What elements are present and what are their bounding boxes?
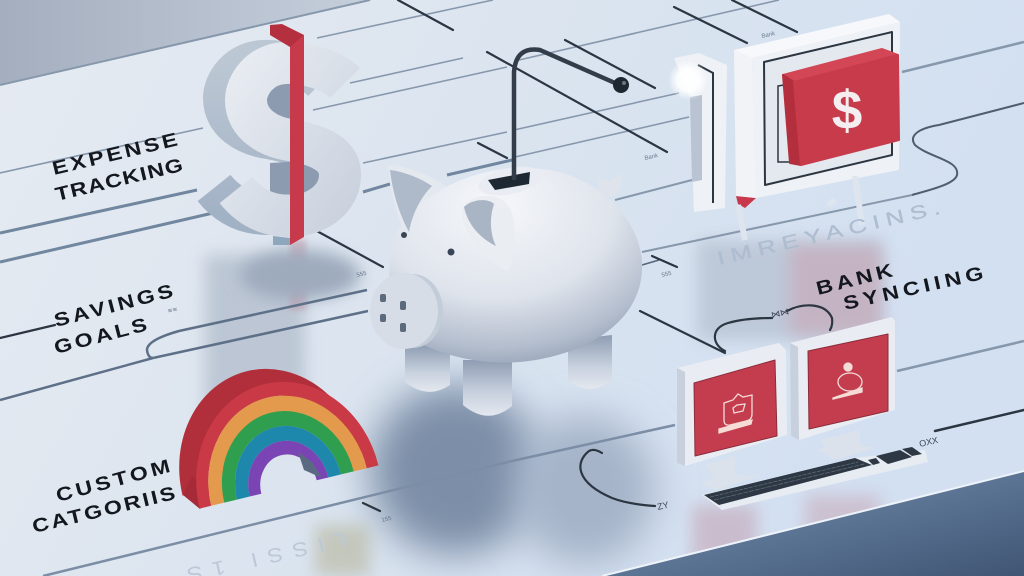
label: savings goals: SAVINGS [52,281,175,331]
pig right ear [462,196,515,272]
label: expense tracking [50,129,185,205]
small annotation marks: Bank [644,153,660,162]
top left background wedge [0,0,372,85]
small annotation marks: ≋≋ [167,307,178,315]
left monitor [677,343,787,490]
small annotation marks: ⋈⋈ [770,306,790,320]
small annotation marks: 555 [661,271,673,279]
pig body [388,168,642,363]
small annotation marks [167,31,939,524]
rainbow back [158,350,361,496]
small annotation marks: 555 [356,271,368,279]
small annotation marks: Bank [761,31,777,40]
keyboard [702,447,928,510]
label: custom categories: CUSTOM [54,456,172,506]
icon: safe with red dollar card: $ [832,79,862,141]
pig snout [383,274,443,348]
small annotation marks: ZY [656,500,670,512]
label: custom categories: CATGORIIS [30,483,177,537]
red card [783,49,898,82]
pig coin slot [476,162,544,200]
label: savings goals [52,281,175,358]
pig legs [405,335,612,416]
reflections on the surface [205,240,882,576]
dollar red bar front [290,35,304,245]
table front edge [602,471,1024,576]
small annotation marks: OXX [918,435,939,449]
right monitor [790,317,895,460]
icon: safe with red dollar card [734,14,900,240]
label: expense tracking: TRACKING [53,155,185,205]
label: bank syncing: BANK [814,260,896,299]
pillar with glow [668,53,727,212]
hook and ball [514,49,615,180]
piggy bank [370,49,642,416]
right monitor icon [833,363,862,399]
pig tail [597,173,622,198]
pig left ear [388,165,447,250]
dollar extrusion [214,61,323,214]
dollar front face [236,63,345,216]
safe stand [738,176,862,240]
label: bank syncing: SYNCIING [841,263,985,314]
right cable [912,103,1024,195]
pig eyes [401,232,407,238]
dollar counters [266,82,292,122]
small annotation marks: 155 [381,516,393,524]
faint embossed text: IMREYACINS. [715,197,942,269]
left monitor icon [719,394,752,433]
label: expense tracking: EXPENSE [50,129,180,179]
label: custom categories [30,456,177,537]
icon: rainbow [158,350,373,509]
label: savings goals: GOALS [52,315,149,358]
icon: dollar sign [214,24,345,245]
